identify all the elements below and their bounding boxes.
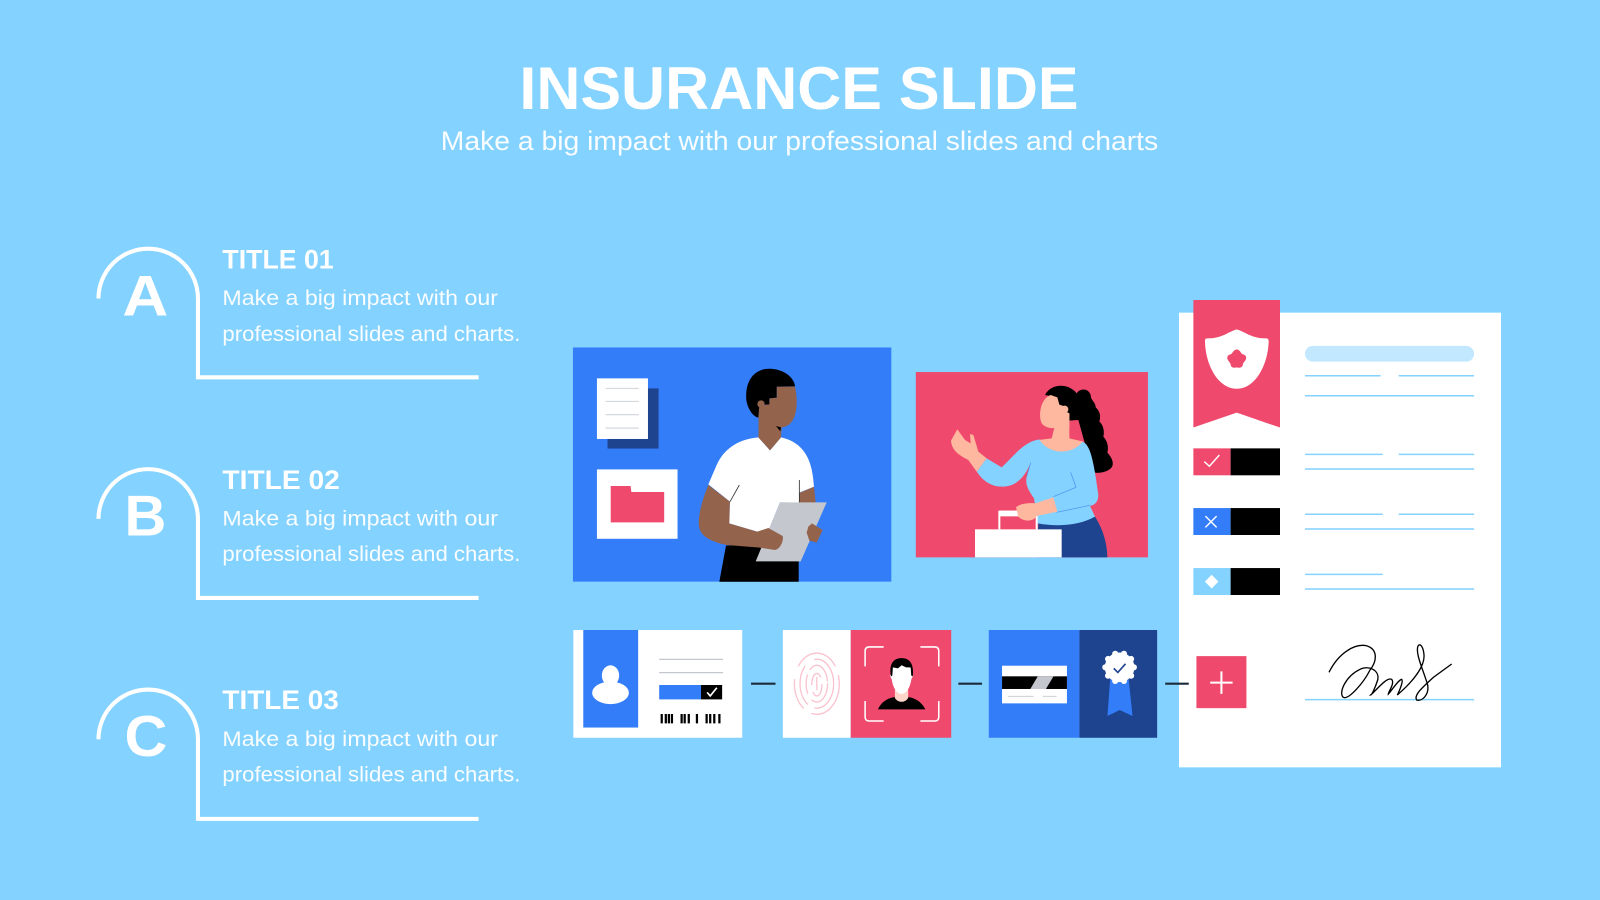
panel: woman with bag [916, 372, 1148, 557]
panel: biometrics [783, 630, 951, 738]
panel: ID card [573, 630, 742, 738]
connector 3 [1165, 683, 1189, 685]
woman figure [951, 386, 1113, 557]
text block C: Make a big impact with our [222, 727, 498, 751]
icon: flower star [1227, 349, 1246, 368]
progress check bar [659, 685, 722, 699]
icon: folder [597, 469, 678, 539]
title: INSURANCE SLIDE [519, 55, 1079, 122]
cross row [1193, 508, 1280, 535]
text block B [222, 507, 520, 566]
barcode [662, 714, 719, 723]
connector 1 [751, 683, 776, 685]
text block A: Make a big impact with our [222, 286, 498, 310]
text block C: professional slides and charts. [222, 763, 520, 787]
heading: title 02: TITLE 02 [222, 465, 340, 495]
diamond row [1193, 568, 1280, 595]
panel: man with documents [573, 347, 891, 582]
check row [1193, 448, 1280, 475]
text block B: Make a big impact with our [222, 507, 498, 531]
bookmark ribbon with shield [1193, 300, 1280, 428]
text block C [222, 727, 520, 787]
text lines [1305, 376, 1474, 589]
text block B: professional slides and charts. [222, 542, 520, 566]
subtitle: Make a big impact with our professional slides and charts [441, 126, 1158, 156]
icon: face scan frame [865, 647, 939, 721]
text block A: professional slides and charts. [222, 322, 520, 346]
letter A: A [122, 264, 168, 328]
letter B: B [124, 485, 166, 549]
signature [1305, 645, 1474, 700]
text lines [659, 659, 723, 673]
text block A [222, 286, 520, 346]
heading: title 03: TITLE 03 [222, 685, 339, 715]
letter C: C [124, 705, 167, 769]
icon: fingerprint [794, 653, 839, 714]
panel: item C [98, 685, 520, 819]
shopping bag [975, 511, 1062, 557]
connector 2 [958, 683, 982, 685]
panel: item B [98, 465, 520, 598]
icon: credit card [1002, 666, 1067, 703]
icon: person [592, 665, 629, 704]
panel: item A [98, 244, 520, 377]
icon: add button [1196, 656, 1246, 708]
arc frame C [98, 690, 479, 819]
man figure [699, 369, 827, 582]
arc frame A [98, 249, 479, 377]
panel: credit card and badge [989, 630, 1157, 738]
heading: title 01: TITLE 01 [222, 244, 334, 274]
icon: award ribbon [1102, 651, 1137, 716]
icon: shield [1205, 329, 1269, 389]
icon: face portrait [878, 658, 925, 709]
icon: document [597, 378, 659, 449]
arc frame B [98, 469, 479, 598]
header pill [1305, 346, 1474, 362]
panel: insurance document [1179, 300, 1501, 767]
